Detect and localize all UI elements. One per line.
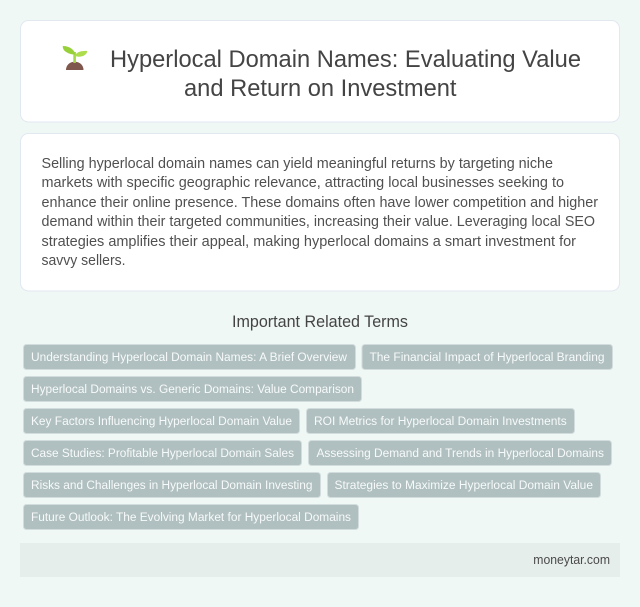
tag: overview	[24, 344, 356, 370]
tag: value comparison	[24, 376, 362, 402]
tag: strategies	[328, 472, 600, 498]
tag: case studies	[24, 440, 302, 466]
tag: financial impact	[362, 344, 612, 370]
panel: summary card	[20, 134, 620, 291]
tag: key factors	[24, 408, 300, 434]
tag list: related terms	[24, 344, 612, 530]
tag: future outlook: Future Outlook: The Evolving Market for Hyperlocal Domains	[31, 510, 351, 524]
icon: seedling	[63, 46, 87, 70]
heading: title	[110, 46, 581, 102]
tag: demand and trends	[308, 440, 612, 466]
tag: future outlook	[24, 504, 358, 530]
text block: summary: markets with specific geographic relevance, attracting local businesses seeking to	[42, 175, 564, 191]
heading: title: and Return on Investment	[184, 75, 457, 102]
text block: summary: strategies amplifies their appeal, making hyperlocal domains a smart investment for	[42, 234, 576, 250]
tag: risks: Risks and Challenges in Hyperlocal Domain Investing	[31, 478, 313, 492]
footer: source: moneytar.com	[533, 552, 610, 567]
tag: value comparison: Hyperlocal Domains vs. Generic Domains: Value Comparison	[31, 382, 354, 396]
text block: summary: demand within their targeted communities, increasing their value. Leveraging local SEO	[42, 214, 595, 230]
tag: key factors: Key Factors Influencing Hyperlocal Domain Value	[31, 414, 292, 428]
tag: roi metrics	[306, 408, 574, 434]
tag: strategies: Strategies to Maximize Hyperlocal Domain Value	[334, 478, 593, 492]
heading: important related terms: Important Related Terms	[232, 313, 408, 331]
text block: summary: savvy sellers.	[42, 253, 126, 269]
tag: roi metrics: ROI Metrics for Hyperlocal Domain Investments	[314, 414, 567, 428]
text block: summary: enhance their online presence. These domains often have lower competition and higher	[42, 195, 598, 211]
text block: summary	[42, 156, 598, 269]
tag: overview: Understanding Hyperlocal Domain Names: A Brief Overview	[31, 350, 347, 364]
text block: summary: Selling hyperlocal domain names can yield meaningful returns by targeting niche	[42, 156, 553, 172]
tag: risks	[24, 472, 320, 498]
tag: case studies: Case Studies: Profitable Hyperlocal Domain Sales	[31, 446, 294, 460]
panel: title card	[20, 20, 620, 122]
tag: demand and trends: Assessing Demand and Trends in Hyperlocal Domains	[316, 446, 604, 460]
heading: title: Hyperlocal Domain Names: Evaluating Value	[110, 46, 581, 73]
tag: financial impact: The Financial Impact of Hyperlocal Branding	[370, 350, 605, 364]
footer	[20, 543, 620, 577]
